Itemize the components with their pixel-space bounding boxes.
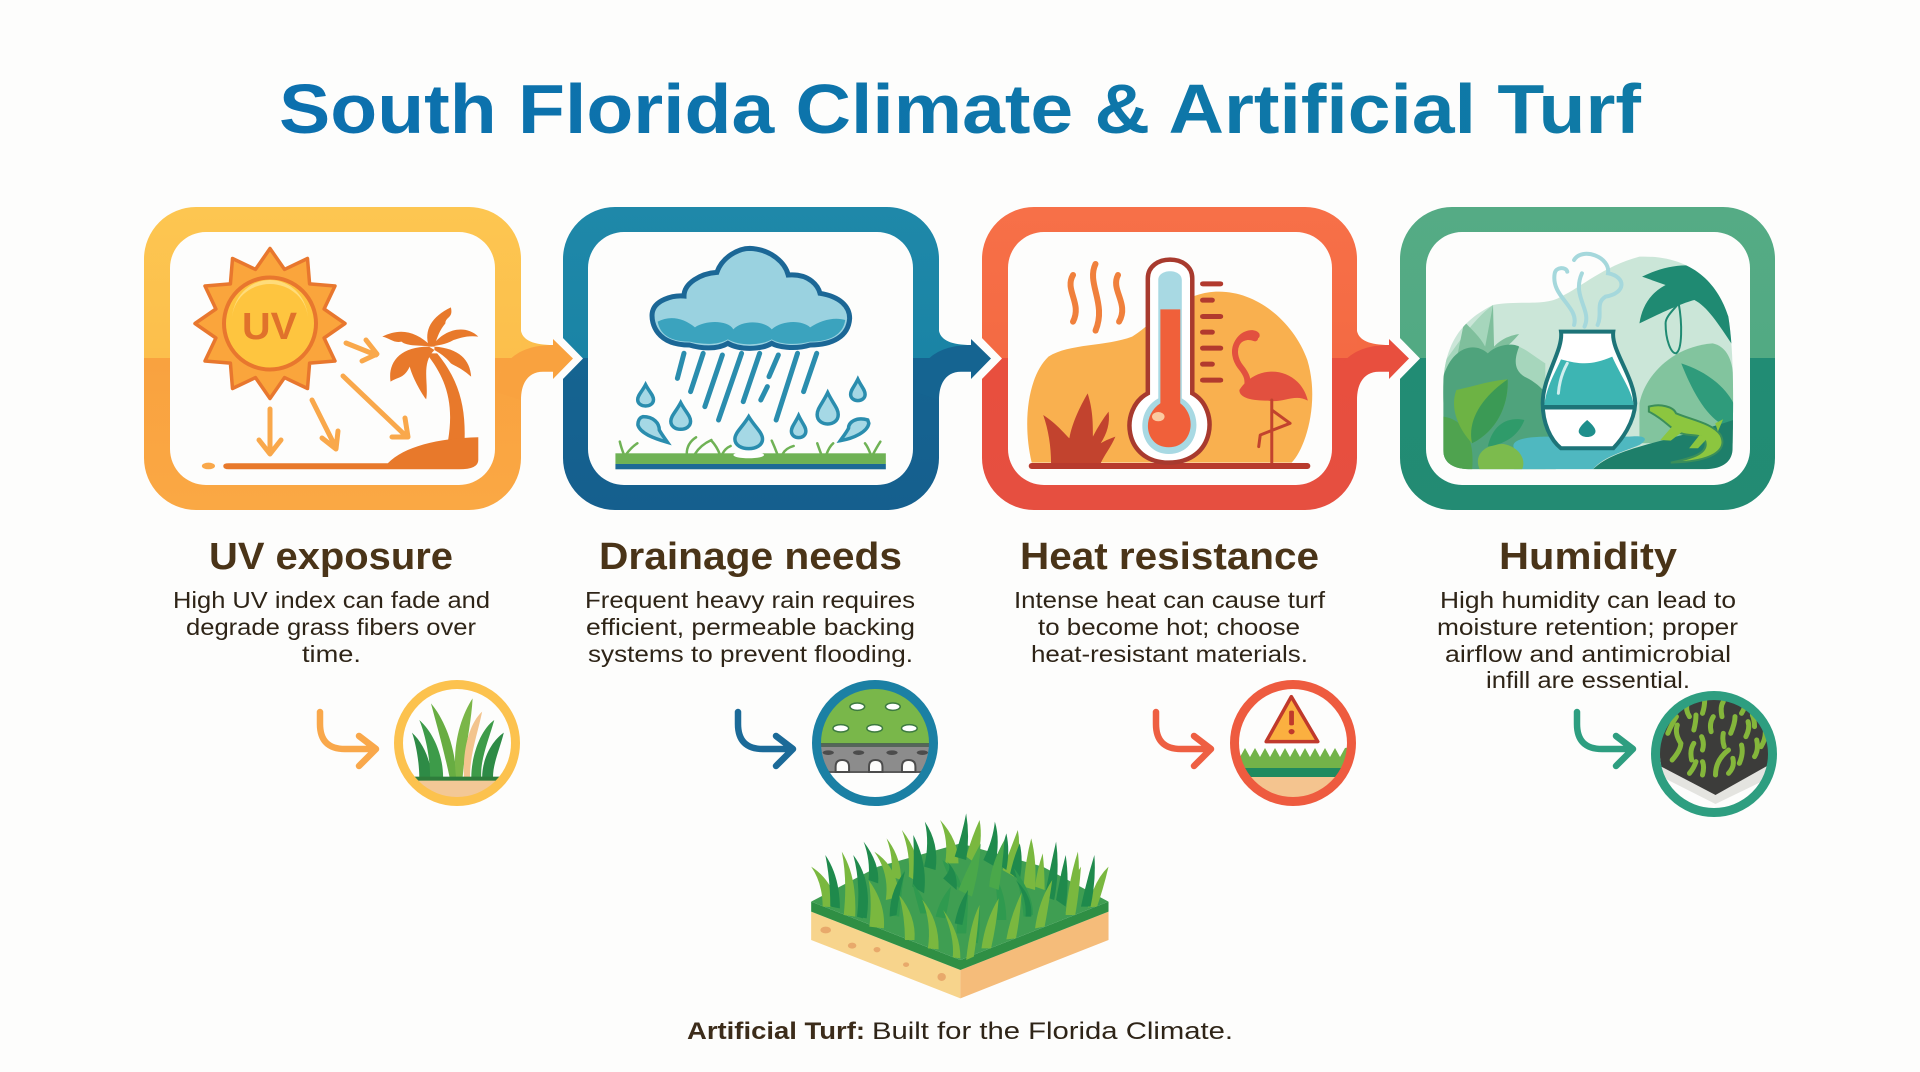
caption: artificial turf tagline: Artificial Turf: <box>687 1018 865 1045</box>
illustration: thermometer, flamingo and heat <box>1027 260 1312 466</box>
heading: Drainage needs: Drainage needs <box>599 536 902 578</box>
arrow: heat to humidity connector <box>1333 339 1409 400</box>
icon: palm tree and beach <box>202 307 478 469</box>
icon: scale ticks <box>1200 281 1223 383</box>
text: UV exposure description <box>173 587 490 667</box>
text: Heat description: Intense heat can cause turf <box>1014 587 1326 613</box>
panel: Heat resistance frame <box>979 207 1389 510</box>
arrow: drainage to heat connector <box>915 339 991 400</box>
text: Humidity description <box>1437 587 1738 693</box>
icon: ground line <box>1032 463 1307 469</box>
icon: lizard <box>1649 405 1723 463</box>
heading: Heat resistance: Heat resistance <box>1020 536 1319 578</box>
icon: heat warning circle <box>1230 684 1356 808</box>
text: UV exposure description: High UV index can fade and <box>173 587 490 613</box>
icon: cloud <box>652 248 850 348</box>
text: Heat description: to become hot; choose <box>1038 614 1300 640</box>
arrow: drainage to backing icon <box>738 712 793 766</box>
soil layer <box>811 912 1109 998</box>
icon: jungle scene <box>1441 253 1739 470</box>
text: Drainage description: systems to prevent flooding. <box>588 641 913 667</box>
panel: Humidity frame <box>1397 207 1775 510</box>
icon: infill turf circle <box>1650 690 1781 812</box>
icon: UV sun: UV <box>242 306 298 348</box>
illustration: rain cloud, drops and grass <box>615 248 886 469</box>
text: Drainage description: efficient, permeable backing <box>586 614 915 640</box>
arrow: heat to warning icon <box>1156 712 1211 766</box>
title: South Florida Climate & Artificial Turf <box>279 70 1642 148</box>
text: Humidity description: High humidity can lead to <box>1440 587 1736 613</box>
icon: rain streaks <box>677 353 817 420</box>
text: Humidity description: infill are essential. <box>1486 667 1690 693</box>
text: Drainage description <box>585 587 915 667</box>
heading: UV exposure: UV exposure <box>209 536 453 578</box>
icon: thermometer <box>1129 260 1210 463</box>
illustration: artificial turf block <box>811 813 1109 998</box>
icon: grass circle <box>394 684 520 820</box>
turf top <box>811 843 1109 960</box>
icon: ray arrows <box>259 340 408 454</box>
text: UV exposure description: degrade grass fibers over <box>186 614 476 640</box>
panel: Drainage needs frame <box>560 207 971 510</box>
icon: flamingo <box>1233 330 1308 463</box>
heading: Humidity: Humidity <box>1499 536 1677 578</box>
front blades <box>890 860 1033 943</box>
icon: UV sun <box>195 248 345 398</box>
text: Humidity description: moisture retention; proper <box>1437 614 1738 640</box>
icon: grass tuft <box>1043 393 1115 463</box>
icon: grass strip <box>615 437 886 469</box>
back blades <box>811 820 1109 917</box>
text: Heat description <box>1014 587 1326 667</box>
icon: heat waves <box>1071 264 1122 331</box>
icon: water drops <box>638 379 869 449</box>
icon: permeable backing circle <box>811 680 939 802</box>
icon: humidifier <box>1543 332 1635 448</box>
caption: artificial turf tagline: Built for the Florida Climate. <box>872 1018 1233 1045</box>
illustration: sun, palm and UV rays <box>195 248 478 469</box>
icon: orange sun blob <box>1027 292 1312 463</box>
illustration: humidifier in tropical scene <box>1441 253 1739 470</box>
text: UV exposure description: time. <box>302 641 361 667</box>
panel: UV exposure frame <box>144 207 553 510</box>
caption: artificial turf tagline <box>687 1018 1233 1045</box>
text: Humidity description: airflow and antimicrobial <box>1445 641 1731 667</box>
arrow: UV to grass icon <box>320 712 376 766</box>
icon: steam <box>1554 254 1621 327</box>
arrow: UV to drainage connector <box>497 339 573 400</box>
text: Drainage description: Frequent heavy rain requires <box>585 587 915 613</box>
turf rim <box>811 902 1109 970</box>
text: Heat description: heat-resistant materials. <box>1031 641 1308 667</box>
arrow: humidity to infill icon <box>1577 712 1633 766</box>
